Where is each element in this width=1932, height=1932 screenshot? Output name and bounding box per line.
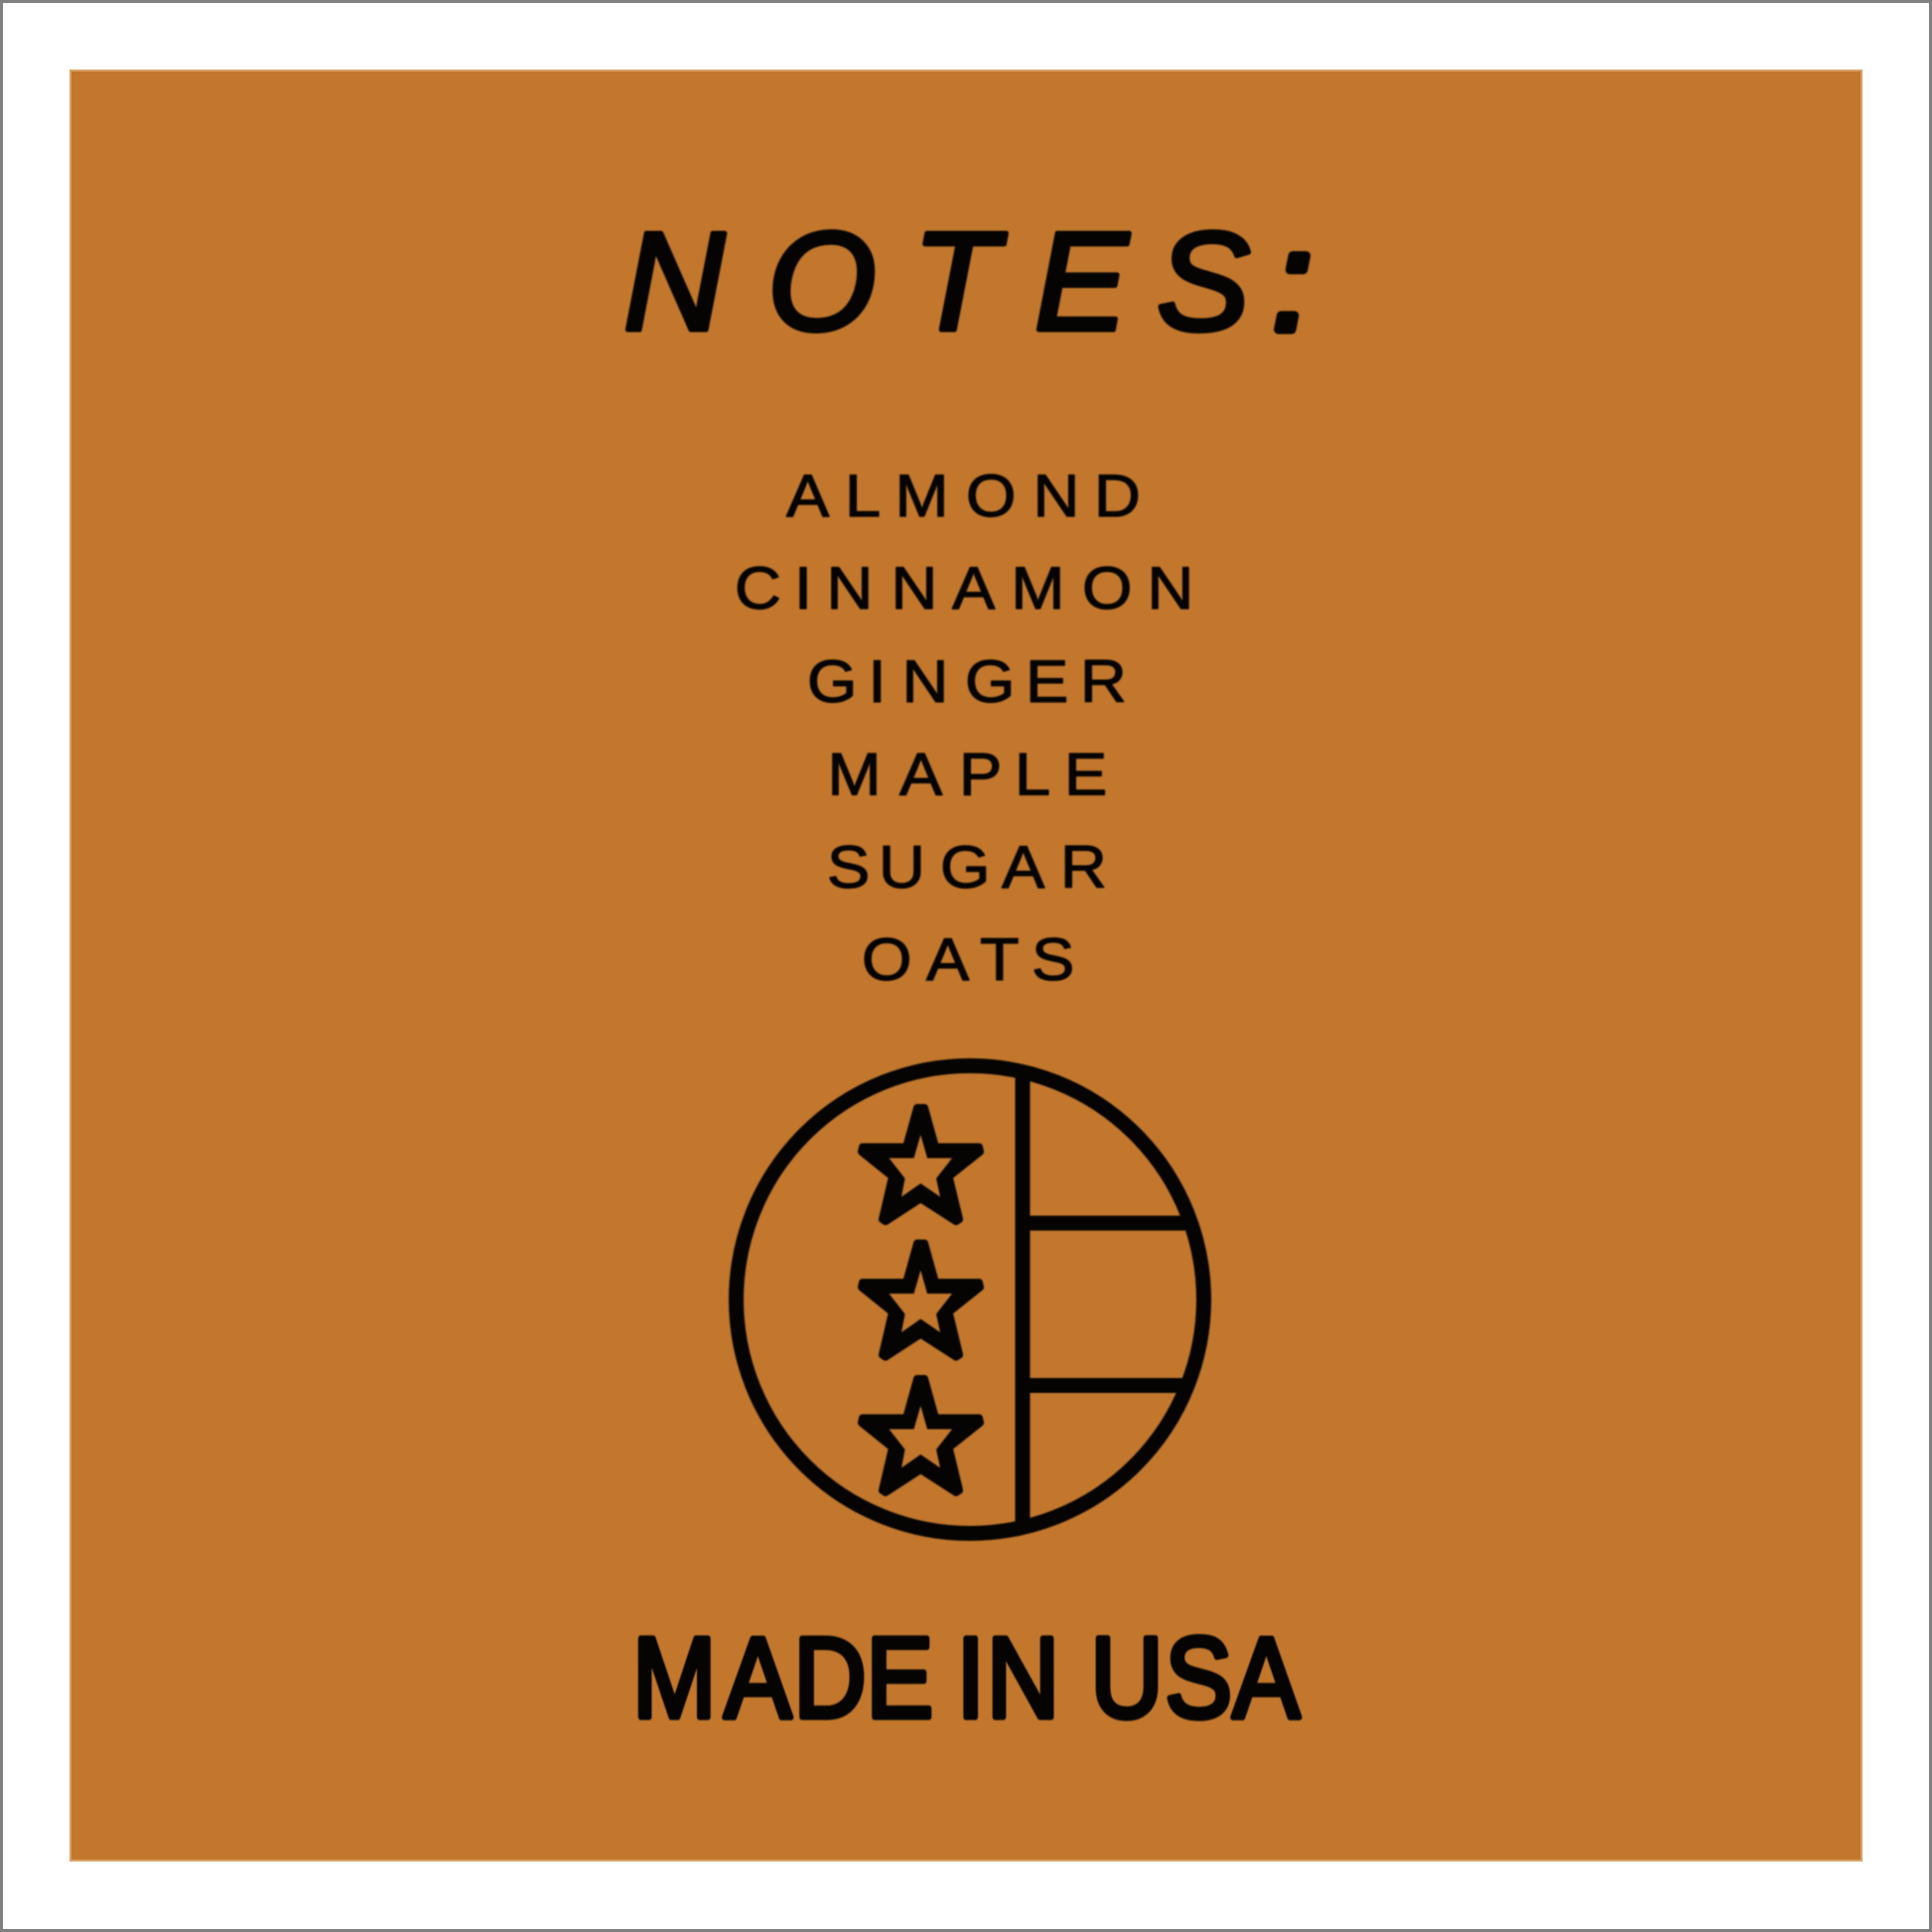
note: ginger: GINGER [807,648,1127,715]
icon: star middle [862,1243,980,1356]
text block: flavour notes list [735,463,1193,993]
icon: american flag circle [737,1066,1203,1533]
note: oats: OATS [862,926,1074,993]
note: cinnamon: CINNAMON [735,555,1193,621]
heading: notes: : [1273,203,1311,359]
note: maple: MAPLE [828,742,1107,808]
icon: star bottom [862,1379,980,1492]
caption: made in usa: MADE IN USA [632,1613,1301,1741]
note: almond: ALMOND [786,463,1141,529]
heading: notes: NOTES [623,203,1250,359]
icon: star top [862,1108,980,1221]
note: sugar: SUGAR [827,834,1107,900]
